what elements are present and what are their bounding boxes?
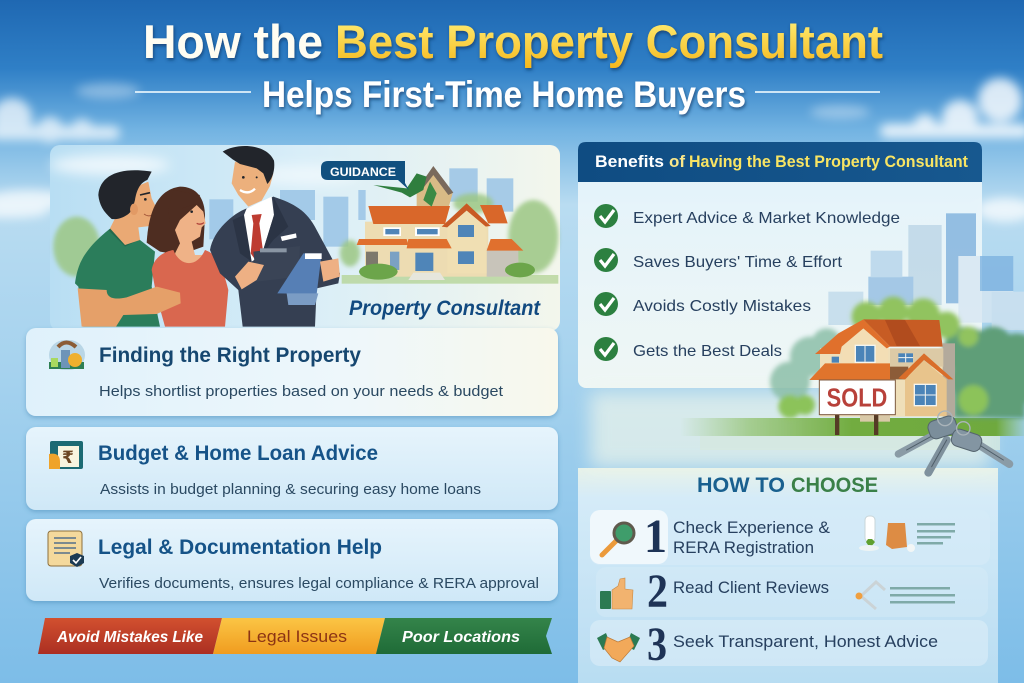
icon: trees: [53, 193, 558, 277]
benefit: saves time: [594, 248, 843, 272]
title: [143, 15, 883, 115]
icon: checklist hand: [859, 516, 955, 552]
icon: sold house: [809, 319, 955, 422]
panel: benefits: [578, 142, 982, 388]
heading: Budget & Home Loan Advice: [98, 442, 378, 465]
panel: how to choose: [578, 468, 998, 683]
benefits header bar: of: [669, 152, 685, 171]
icon: trees and shrubs: [770, 297, 1024, 418]
panel: hero illustration: [50, 145, 560, 331]
callout: guidance tag: GUIDANCE: [330, 165, 396, 179]
benefit: avoids mistakes: Avoids Costly Mistakes: [633, 298, 811, 315]
benefit: best deals: [594, 337, 782, 361]
icon: rupee note: [49, 441, 83, 469]
icon: properties: [49, 340, 85, 370]
icon: keys: [898, 411, 1009, 473]
heading: CHOOSE: [791, 474, 878, 497]
pale water band: [700, 436, 1000, 450]
icon: review lines: [856, 582, 955, 609]
icon: rupee note: ₹: [62, 448, 74, 468]
title rule left: [135, 91, 251, 93]
icon: thumbs up: [600, 578, 633, 609]
illustration: sold house scene: [590, 213, 1024, 468]
panel: finding the right property: [26, 328, 558, 416]
panel: legal and documentation: [26, 519, 558, 601]
pale ground fade: [590, 392, 990, 468]
heading: HOW TO: [697, 474, 785, 497]
benefit: best deals: Gets the Best Deals: [633, 343, 782, 360]
step 1: RERA Registration: [673, 539, 814, 557]
step 2: Read Client Reviews: [673, 579, 829, 597]
icon: document with shield: [48, 531, 84, 567]
callout: guidance tag: [321, 161, 409, 190]
description: Assists in budget planning & securing easy home loans: [100, 481, 481, 498]
step 2: [596, 565, 988, 618]
benefit: avoids mistakes: [594, 292, 811, 316]
benefits header bar: [578, 142, 982, 182]
step 3: Seek Transparent, Honest Advice: [673, 633, 938, 651]
title: Best Property Consultant: [335, 15, 883, 68]
icon: magnifier: [602, 523, 634, 555]
heading: Legal & Documentation Help: [98, 536, 382, 559]
step 2: 2: [647, 565, 668, 618]
ribbon segment: poor locations: [376, 618, 552, 654]
title: How the: [143, 15, 323, 68]
step 1: 1: [644, 510, 667, 563]
step 3: 3: [647, 618, 667, 671]
ribbon: avoid mistakes: [38, 618, 552, 654]
benefits header bar: Benefits: [595, 152, 664, 171]
step 1: [590, 510, 990, 565]
heading: property consultant: Property Consultant: [349, 297, 541, 320]
icon: handshake: [597, 633, 640, 662]
icon: city skyline: [828, 213, 1024, 330]
ribbon segment: legal issues: [213, 618, 385, 654]
step 1: Check Experience &: [673, 519, 830, 537]
ribbon segment: legal issues: Legal Issues: [247, 627, 347, 646]
benefit: saves time: Saves Buyers' Time & Effort: [633, 254, 843, 271]
lawn strip: [680, 418, 1024, 436]
icon: sold sign: SOLD: [827, 383, 887, 413]
icon: woman in coral shirt: [147, 187, 228, 327]
step 3: [590, 618, 988, 671]
benefit: expert advice: [594, 204, 900, 228]
title rule right: [755, 91, 880, 93]
icon: consultant in suit: [210, 146, 340, 327]
icon: sold sign: [819, 380, 895, 435]
description: Helps shortlist properties based on your needs & budget: [99, 383, 504, 400]
icon: hero house: [342, 166, 558, 284]
heading: Finding the Right Property: [99, 344, 361, 367]
benefit: expert advice: Expert Advice & Market Knowledge: [633, 210, 900, 227]
benefits header bar: Having the Best Property Consultant: [689, 152, 968, 171]
ribbon segment: poor locations: Poor Locations: [402, 629, 520, 646]
icon: man's forearm and hand: [78, 287, 181, 327]
panel: budget and home loan: [26, 427, 558, 510]
ribbon segment: avoid mistakes like: Avoid Mistakes Like: [56, 629, 203, 646]
description: Verifies documents, ensures legal compliance & RERA approval: [99, 575, 539, 592]
ribbon segment: avoid mistakes like: [38, 618, 222, 654]
title: Helps First-Time Home Buyers: [262, 74, 746, 115]
icon: background skyline: [209, 168, 513, 247]
icon: man in green shirt: [75, 170, 160, 327]
